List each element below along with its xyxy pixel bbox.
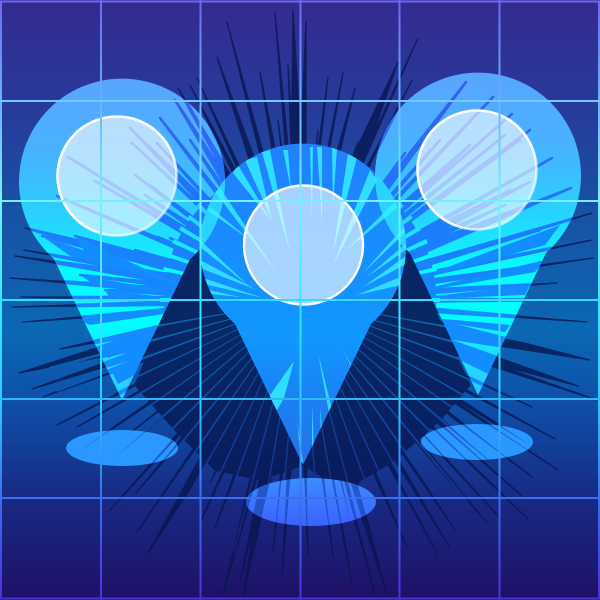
centre map pin <box>200 144 410 465</box>
overlap lens: right pin over centre pin <box>375 173 406 249</box>
light gaps between the dark rays <box>44 300 556 560</box>
pin shadow: right <box>421 424 533 460</box>
right pin head circle <box>418 110 536 230</box>
left map pin <box>19 78 225 398</box>
right map pin <box>375 72 581 395</box>
centre pin head circle <box>244 186 363 304</box>
overlap lens: left pin over centre pin <box>202 180 225 246</box>
left pin head circle <box>58 116 176 236</box>
pin shadow: left <box>66 430 178 466</box>
pin shadow: centre <box>246 478 376 526</box>
rays crossing the pin shadows <box>78 424 529 526</box>
